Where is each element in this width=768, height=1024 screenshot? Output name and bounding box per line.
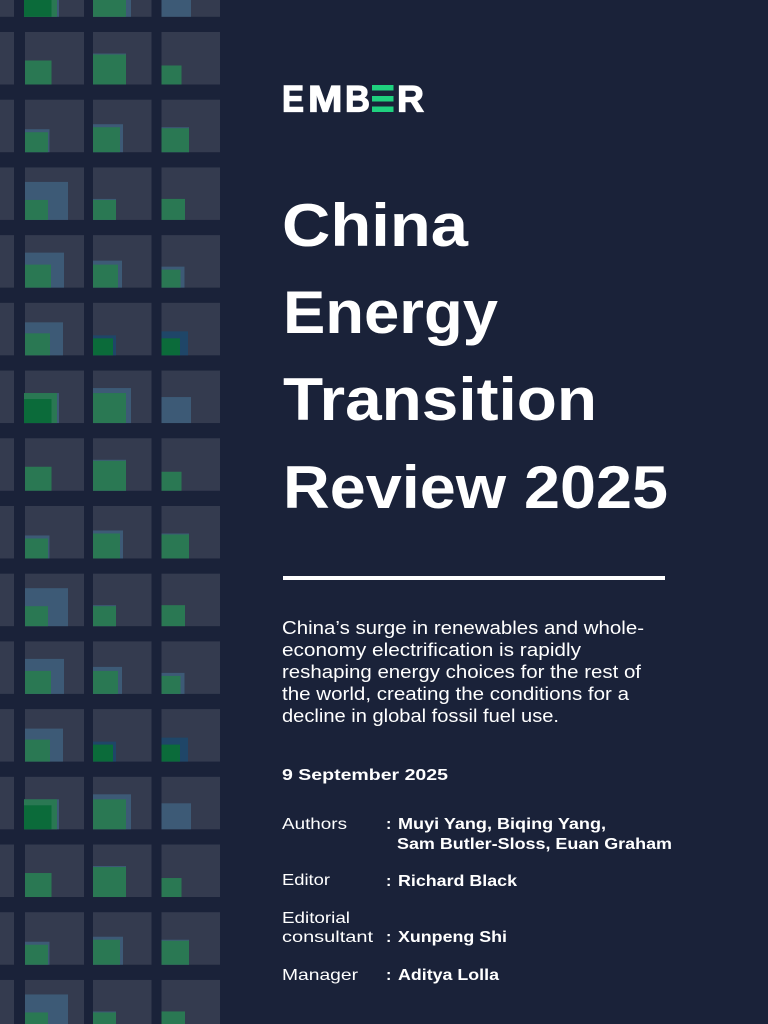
logo: EMBER: M [308,78,342,120]
tile row 11 [0,641,220,694]
credits: editorial consultant: Xunpeng Shi [398,929,507,946]
tile row 2 [0,32,220,84]
credits: editorial consultant: consultant [282,929,374,946]
credits: authors: Sam Butler-Sloss, Euan Graham [397,836,672,853]
title: China [282,192,469,259]
tile row 8 [0,438,220,491]
tile row 12 [0,709,220,762]
credits: editorial consultant [282,910,507,946]
credits: authors: : [386,816,391,833]
tile row 15 [0,912,220,965]
logo: EMBER: B [345,78,370,120]
summary text: economy electrification is rapidly [282,640,581,660]
summary text: reshaping energy choices for the rest of [282,662,642,682]
tile row 9 [0,506,220,558]
logo: EMBER [282,78,424,120]
title: Transition [283,366,597,433]
credits: manager: Manager [282,967,359,984]
tile row 6 [0,303,220,355]
tile row 16 [0,980,220,1024]
credits: manager: Aditya Lolla [398,967,499,984]
tile row 5 [0,235,220,288]
credits: manager: : [386,967,391,984]
tile row 14 [0,845,220,897]
title rule [283,576,665,580]
summary text: the world, creating the conditions for a [282,684,630,704]
title: Review 2025 [283,454,668,521]
credits: authors: Muyi Yang, Biqing Yang, [398,816,606,833]
tile row 13 [0,777,220,829]
credits: editor: Richard Black [398,873,517,890]
summary text: China’s surge in renewables and whole- [282,618,644,638]
summary text: decline in global fossil fuel use. [282,706,559,726]
title: Energy [283,279,499,346]
credits: editorial consultant: : [386,929,391,946]
credits: editor: Editor [282,872,331,889]
publication date: 9 September 2025 [282,767,448,784]
tile row 3 [0,100,220,152]
panel: decorative chart tile column [0,0,220,1024]
title [282,192,668,521]
logo: EMBER: R [397,78,424,120]
credits: authors [282,816,672,853]
logo: EMBER: E [282,78,304,120]
tile row 7 [0,371,220,423]
credits: editorial consultant: Editorial [282,910,350,927]
credits: manager [282,967,499,984]
tile row 10 [0,574,220,626]
credits: editor: : [386,873,391,890]
tile row 1 [0,0,220,17]
summary text [282,618,644,726]
tile row 4 [0,167,220,220]
credits: editor [282,872,517,890]
credits: authors: Authors [282,816,347,833]
